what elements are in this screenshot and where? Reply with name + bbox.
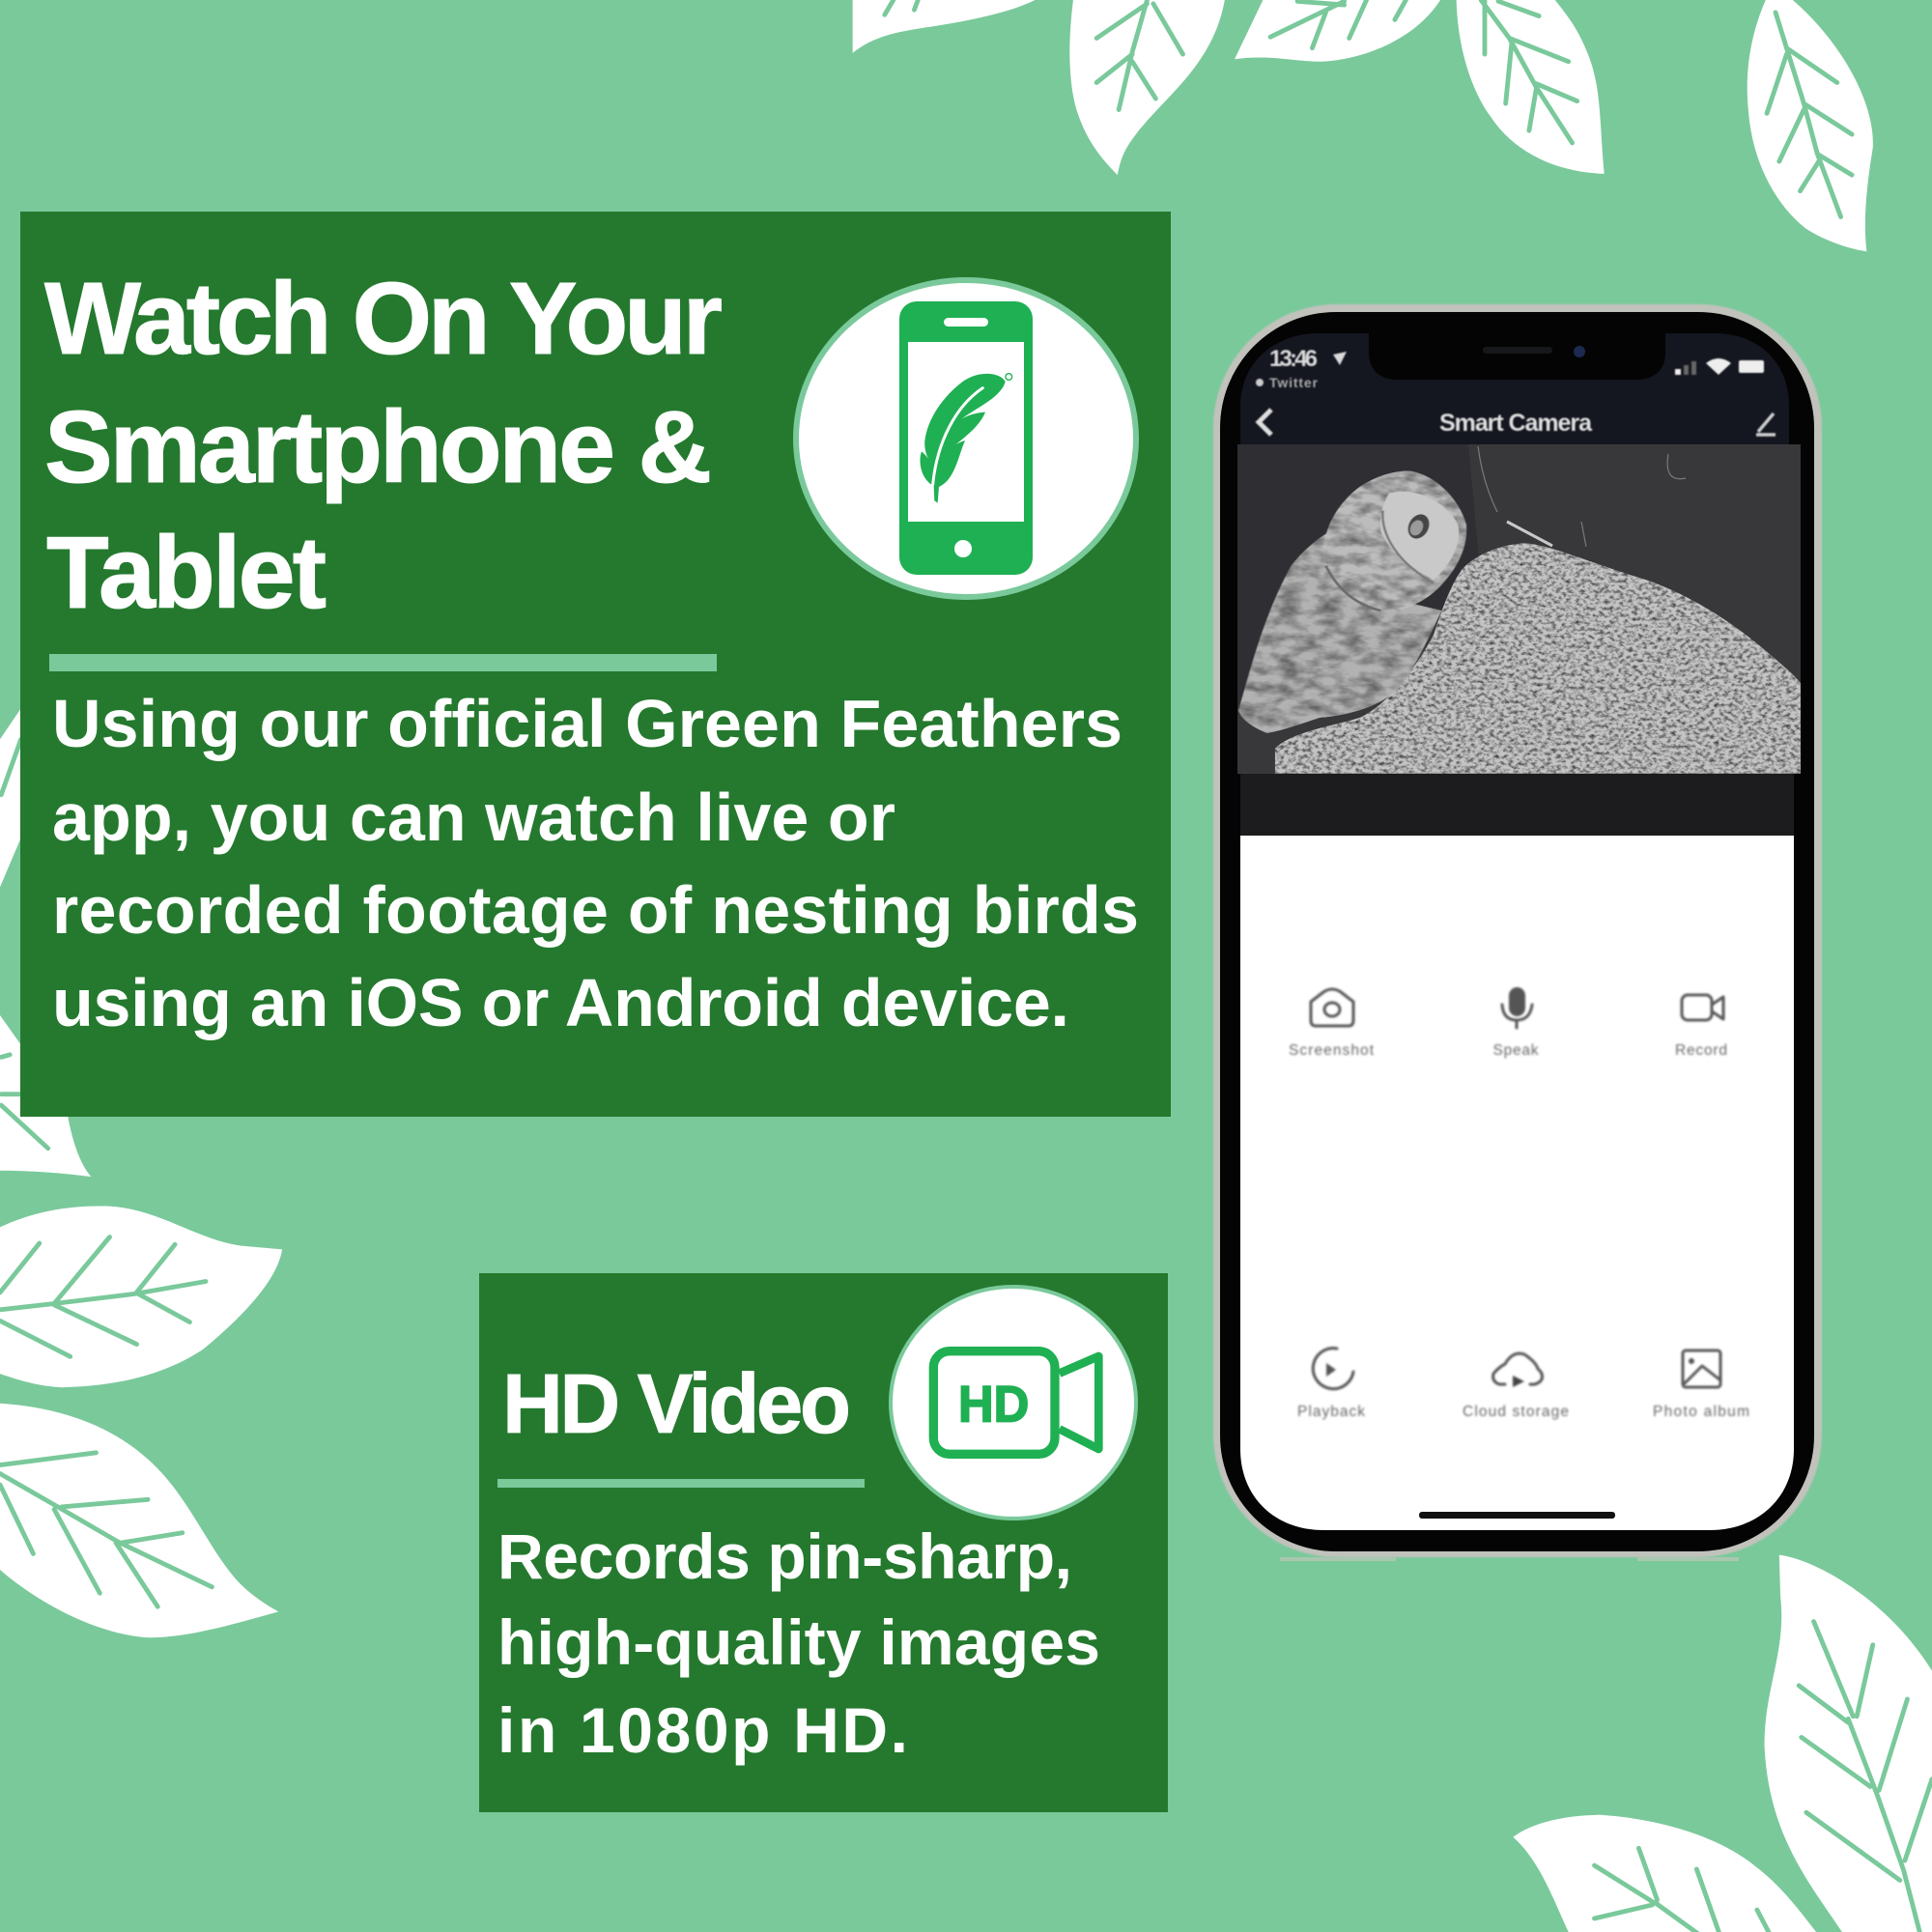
control: playback xyxy=(1297,1349,1365,1420)
leaf: top 3 xyxy=(1235,0,1440,62)
body text: app description: using an iOS or Android device. xyxy=(52,965,1069,1040)
owl body and head xyxy=(1238,470,1466,733)
icon: hd video camera: HD xyxy=(958,1376,1029,1433)
leaf: left edge upper xyxy=(0,708,21,887)
heading rule xyxy=(49,654,717,671)
icon: smartphone with feather logo xyxy=(796,280,1136,597)
heading: watch on your smartphone and tablet: Watch On Your xyxy=(44,262,723,376)
leaf: top 4 xyxy=(1457,0,1605,174)
phone frame xyxy=(1213,304,1822,1561)
heading: watch on your smartphone and tablet: Tablet xyxy=(46,516,327,630)
owl live video feed xyxy=(1237,444,1801,774)
body text: app description xyxy=(52,686,1139,1040)
control: record xyxy=(1675,995,1727,1059)
heading: watch on your smartphone and tablet: Smartphone & xyxy=(44,390,712,504)
leaf: bottom right upper xyxy=(1765,1555,1932,1932)
panel: watch on your smartphone and tablet xyxy=(20,212,1171,1117)
home bar xyxy=(1419,1512,1615,1519)
app header: 13:46 xyxy=(1269,346,1318,372)
app header: Twitter xyxy=(1269,375,1319,390)
heading: hd video: HD Video xyxy=(502,1357,851,1451)
control: speak: Speak xyxy=(1493,1042,1539,1059)
leaf: left lower xyxy=(0,1404,278,1637)
control: screenshot xyxy=(1289,989,1375,1059)
control: record: Record xyxy=(1675,1042,1727,1059)
leaf: bottom right bottom xyxy=(1513,1815,1816,1932)
icon: hd video camera xyxy=(891,1287,1136,1519)
control: speak xyxy=(1493,987,1539,1059)
body text: 1080p description xyxy=(497,1520,1100,1766)
control: photo album: Photo album xyxy=(1653,1404,1749,1420)
body text: 1080p description: Records pin-sharp, xyxy=(497,1520,1072,1592)
strip below video xyxy=(1240,774,1794,836)
leaf: top 2 xyxy=(1069,0,1225,175)
leaf: top 5 xyxy=(1747,0,1873,251)
app header xyxy=(1240,312,1789,444)
control: cloud storage xyxy=(1463,1353,1569,1420)
control: screenshot: Screenshot xyxy=(1289,1042,1375,1059)
smartphone mockup xyxy=(1213,304,1822,1561)
app controls panel xyxy=(1240,836,1794,1530)
heading: watch on your smartphone and tablet xyxy=(44,262,723,630)
body text: app description: Using our official Green Feathers xyxy=(52,686,1122,761)
app header: Smart Camera xyxy=(1439,410,1593,437)
heading rule xyxy=(497,1479,865,1488)
body text: 1080p description: in 1080p HD. xyxy=(497,1694,908,1766)
leaf: left middle xyxy=(0,1207,282,1387)
control: photo album xyxy=(1653,1350,1749,1420)
body text: app description: app, you can watch live or xyxy=(52,780,895,855)
panel: hd video xyxy=(479,1273,1168,1812)
nest wood chips xyxy=(1275,543,1801,774)
leaf: left edge under panel xyxy=(0,1015,91,1177)
leaf: top 1 xyxy=(853,0,1035,53)
body text: 1080p description: high-quality images xyxy=(497,1606,1100,1678)
body text: app description: recorded footage of nesting birds xyxy=(52,872,1139,948)
control: cloud storage: Cloud storage xyxy=(1463,1404,1569,1420)
control: playback: Playback xyxy=(1297,1404,1365,1420)
